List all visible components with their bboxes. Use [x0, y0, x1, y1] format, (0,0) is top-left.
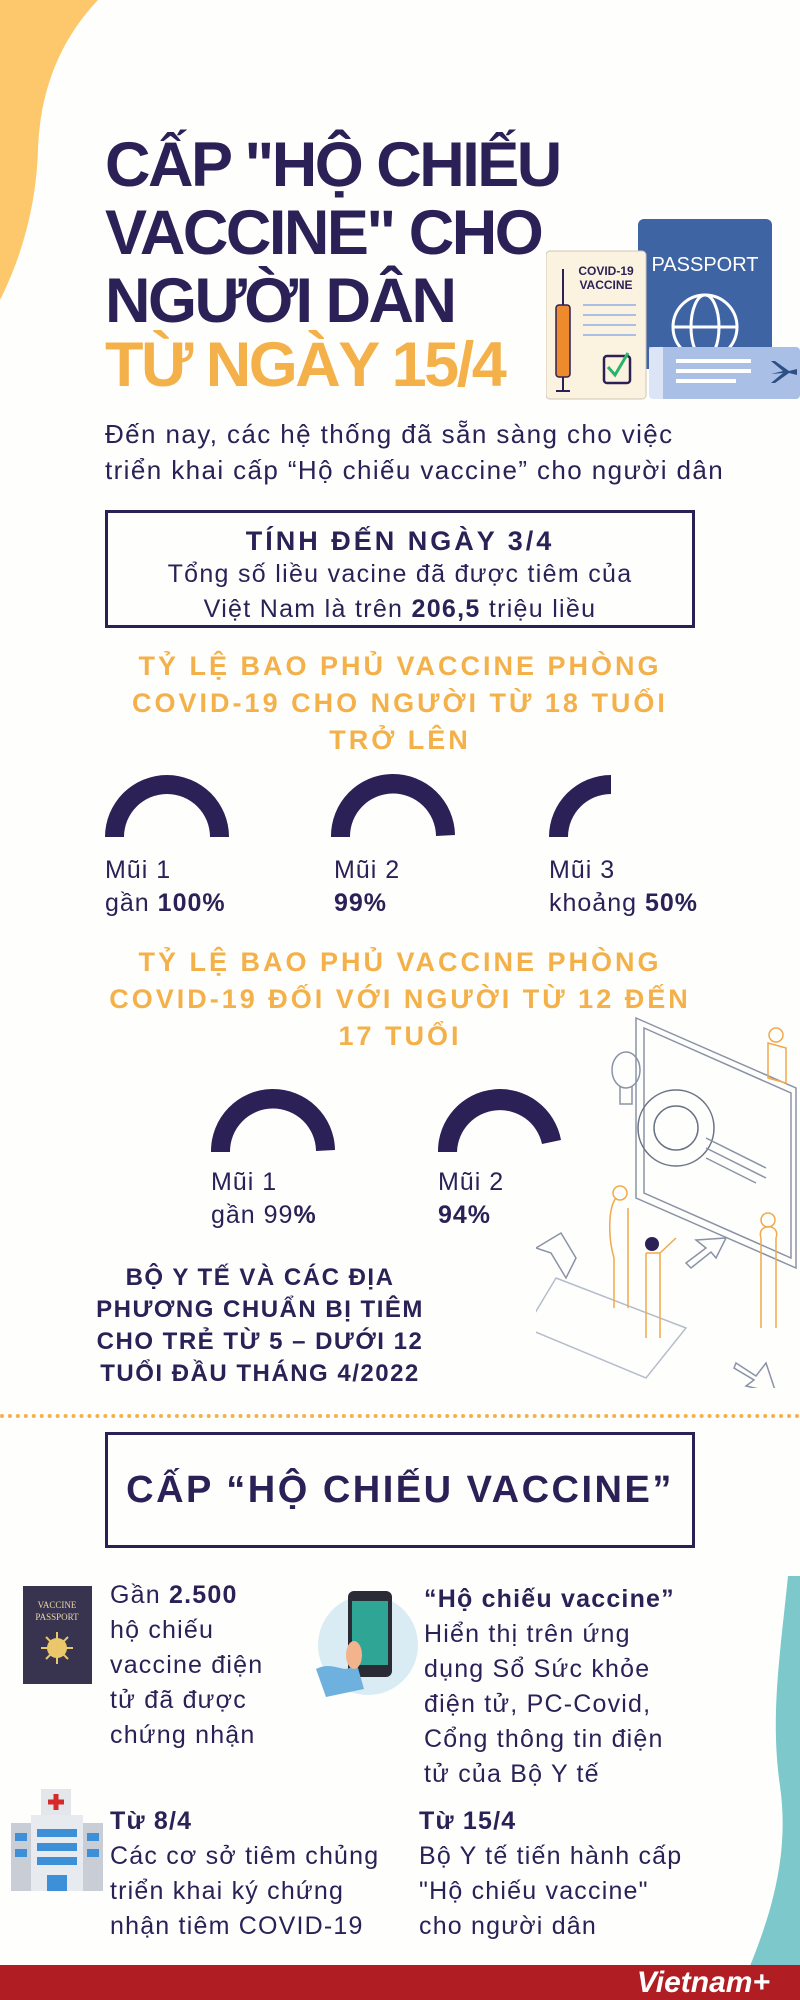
text: khoảng 50%	[549, 889, 698, 917]
labels row 2: Mũi 1	[211, 1168, 277, 1196]
item: 2500 passports: tử đã được	[110, 1686, 247, 1714]
labels row 1: Mũi 1	[105, 856, 171, 884]
item: 2500 passports: Gần 2.500	[110, 1581, 238, 1609]
heading: coverage 18+: TỶ LỆ BAO PHỦ VACCINE PHÒNG	[138, 651, 662, 681]
subtitle text	[105, 419, 724, 485]
bold statement: children 5-12	[96, 1263, 424, 1387]
title: TỪ NGÀY 15/4	[105, 330, 504, 400]
icon: passport and vaccine card: COVID-19	[578, 264, 634, 278]
text: 99%	[334, 889, 387, 917]
text: 94%	[438, 1201, 491, 1229]
heading: coverage 18+	[132, 650, 668, 755]
icon: passport and vaccine card: VACCINE	[579, 278, 633, 292]
decorative orange blob	[0, 0, 98, 300]
subtitle text: Đến nay, các hệ thống đã sẵn sàng cho việc	[105, 419, 674, 449]
icon: vaccine passport	[23, 1586, 92, 1684]
callout box: total doses: TÍNH ĐẾN NGÀY 3/4	[246, 526, 554, 556]
item: 2500 passports: chứng nhận	[110, 1721, 256, 1749]
item: from 8/4: Từ 8/4	[110, 1807, 192, 1835]
heading: coverage 18+: COVID-19 CHO NGƯỜI TỪ 18 TUỔI	[132, 688, 668, 718]
item: from 8/4: nhận tiêm COVID-19	[110, 1912, 364, 1940]
title: NGƯỜI DÂN	[105, 266, 455, 336]
item: 2500 passports	[110, 1581, 263, 1749]
item: displayed on apps: tử của Bộ Y tế	[424, 1760, 600, 1788]
item: from 8/4	[110, 1807, 379, 1940]
text: Mũi 2	[334, 856, 400, 884]
heading: coverage 12-17	[109, 946, 691, 1051]
footer bar with logo: Vietnam+	[637, 1966, 770, 1999]
divider dotted	[0, 1414, 800, 1418]
heading: coverage 12-17: TỶ LỆ BAO PHỦ VACCINE PHÒNG	[138, 947, 662, 977]
illustration: isometric presentation	[536, 1016, 797, 1388]
footer bar with logo	[0, 1965, 800, 2000]
heading: coverage 12-17: COVID-19 ĐỐI VỚI NGƯỜI TỪ 12 ĐẾN	[109, 984, 691, 1014]
item: from 15/4: Bộ Y tế tiến hành cấp	[419, 1842, 682, 1870]
item: displayed on apps: Hiển thị trên ứng	[424, 1620, 631, 1648]
text: Mũi 2	[438, 1168, 504, 1196]
text: Mũi 3	[549, 856, 615, 884]
bold statement: children 5-12: CHO TRẺ TỪ 5 – DƯỚI 12	[97, 1328, 423, 1355]
item: 2500 passports: hộ chiếu	[110, 1616, 214, 1644]
item: from 15/4: Từ 15/4	[419, 1807, 516, 1835]
item: from 15/4: "Hộ chiếu vaccine"	[419, 1877, 649, 1905]
labels row 2	[211, 1168, 317, 1229]
title: CẤP "HỘ CHIẾU	[105, 130, 560, 200]
item: displayed on apps	[424, 1585, 675, 1788]
item: displayed on apps: “Hộ chiếu vaccine”	[424, 1585, 675, 1613]
item: displayed on apps: dụng Sổ Sức khỏe	[424, 1655, 650, 1683]
title: VACCINE" CHO	[105, 198, 541, 268]
item: 2500 passports: vaccine điện	[110, 1651, 263, 1679]
subtitle text: triển khai cấp “Hộ chiếu vaccine” cho người dân	[105, 455, 724, 485]
bold statement: children 5-12: PHƯƠNG CHUẨN BỊ TIÊM	[96, 1296, 424, 1323]
labels row 2: gần 99%	[211, 1201, 317, 1229]
callout box: total doses: Việt Nam là trên 206,5 triệu liều	[204, 595, 596, 623]
bold statement: children 5-12: BỘ Y TẾ VÀ CÁC ĐỊA	[126, 1264, 394, 1291]
item: displayed on apps: Cổng thông tin điện	[424, 1725, 664, 1753]
icon: vaccine passport: VACCINE	[38, 1600, 77, 1610]
icon: vaccine passport: PASSPORT	[35, 1612, 79, 1622]
labels row 1	[105, 856, 226, 917]
icon: passport and vaccine card: PASSPORT	[651, 254, 759, 276]
title	[105, 130, 560, 400]
item: displayed on apps: điện tử, PC-Covid,	[424, 1690, 651, 1718]
gauge charts row 1	[105, 774, 611, 837]
heading: coverage 18+: TRỞ LÊN	[329, 725, 471, 755]
icon: passport and vaccine card	[546, 219, 800, 400]
gauge charts row 2	[211, 1089, 561, 1152]
decorative teal wave	[750, 1576, 800, 1965]
section heading box: CẤP “HỘ CHIẾU VACCINE”	[126, 1469, 674, 1511]
item: from 15/4: cho người dân	[419, 1912, 597, 1940]
callout box: total doses	[105, 510, 695, 628]
callout box: total doses: Tổng số liều vacine đã được tiêm của	[168, 560, 632, 588]
icon: hospital	[11, 1789, 103, 1891]
heading: coverage 12-17: 17 TUỔI	[338, 1021, 462, 1051]
icon: phone in hand	[316, 1591, 418, 1697]
labels row 1: gần 100%	[105, 889, 226, 917]
item: from 8/4: triển khai ký chứng	[110, 1877, 344, 1905]
item: from 8/4: Các cơ sở tiêm chủng	[110, 1842, 379, 1870]
bold statement: children 5-12: TUỔI ĐẦU THÁNG 4/2022	[100, 1360, 420, 1387]
section heading box	[105, 1432, 695, 1548]
item: from 15/4	[419, 1807, 682, 1940]
